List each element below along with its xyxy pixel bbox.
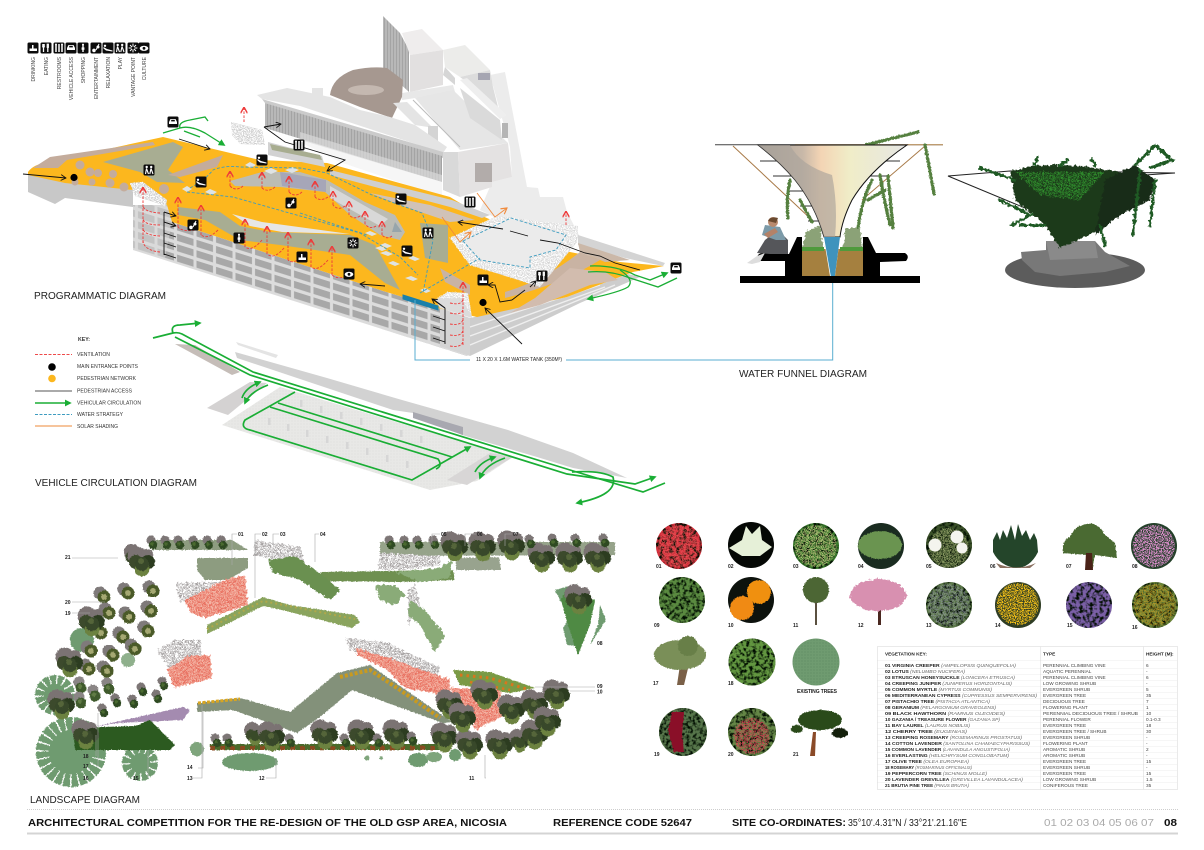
vegetation key table: 16 EVERLASTING (HELICHRYSUM CONGLOBATUM) <box>885 753 1009 758</box>
water strategy dashed lines <box>187 166 566 293</box>
vegetation key table: CONIFEROUS TREE <box>1043 783 1088 788</box>
vegetation key table: EVERGREEN TREE <box>1043 771 1086 776</box>
vegetation key table: 0.1-0.3 <box>1146 717 1161 722</box>
large trees <box>48 530 611 750</box>
vegetation key table: 18 ROSEMARY (ROSMARINUS OFFICINALIS) <box>885 765 972 770</box>
09 black hawthorn: 09 <box>654 623 660 629</box>
plant number labels and leaders: 02 <box>262 532 268 538</box>
vegetation key table: 1 <box>1146 705 1149 710</box>
vegetation key table: PERENNIAL FLOWER <box>1043 717 1091 722</box>
key: VEHICULAR CIRCULATION <box>77 400 141 406</box>
vegetation key table: 20 LAVENDER GREVILLEA (GREVILLEA LAVANDULACEA) <box>885 777 1023 782</box>
plant number labels and leaders: 14 <box>187 765 193 771</box>
plant number labels and leaders: 21 <box>65 555 71 561</box>
funnel membrane <box>758 145 907 237</box>
vegetation key table: VEGETATION KEY: <box>885 652 927 656</box>
vegetation key table: AROMATIC SHRUB <box>1043 753 1085 758</box>
vegetation key table: EVERGREEN SHRUB <box>1043 687 1090 692</box>
legend: programme icons: VEHICLE ACCESS <box>69 56 75 100</box>
vegetation key table: EVERGREEN TREE <box>1043 693 1086 698</box>
plant number labels and leaders <box>65 532 603 782</box>
vegetation key table: 01 VIRGINIA CREEPER (AMPELOPSIS QUINQUEFOLIA) <box>885 663 1016 668</box>
footer band: ARCHITECTURAL COMPETITION FOR THE RE-DESIGN OF THE OLD GSP AREA, NICOSIA <box>28 817 507 829</box>
vegetation key table: - <box>1146 741 1148 746</box>
vegetation key table: 5 <box>1146 687 1149 692</box>
pedestrian network deck <box>28 137 664 317</box>
vegetation key table: 10 <box>1146 711 1152 716</box>
vegetation key table: 11 BAY LAUREL (LAURUS NOBILIS) <box>885 723 970 728</box>
water tank leader line and label <box>415 283 833 363</box>
key <box>35 337 141 430</box>
13 creeping rosemary <box>926 582 972 629</box>
footer band: 35°10'.4.31"N / 33°21'.21.16"E <box>848 818 967 829</box>
plant number labels and leaders: 15 <box>133 776 139 782</box>
purple and dark planting wedge <box>73 707 190 750</box>
legend: programme icons: EATING <box>44 57 50 75</box>
vegetation key table: 35 <box>1146 693 1152 698</box>
programme icons on deck <box>144 116 682 286</box>
heading: landscape diagram: LANDSCAPE DIAGRAM <box>30 795 140 806</box>
vegetation key table: 7 <box>1146 699 1149 704</box>
21 brutia pine: 21 <box>793 752 799 758</box>
existing trees swatch <box>792 638 840 695</box>
plant number labels and leaders: 18 <box>83 754 89 760</box>
heading: vehicle circulation diagram: VEHICLE CIRCULATION DIAGRAM <box>35 478 197 489</box>
plant number labels and leaders: 20 <box>65 600 71 606</box>
18 rosemary <box>728 638 776 687</box>
vegetation key table: PERENNIAL DECIDUOUS TREE / SHRUB <box>1043 711 1138 716</box>
legend: programme icons: VANTAGE POINT <box>131 57 137 97</box>
01 virginia creeper <box>656 523 702 570</box>
plant number labels and leaders: 16 <box>83 776 89 782</box>
03 honeysuckle: 03 <box>793 564 799 570</box>
bottom tree row and curved grove <box>210 680 570 760</box>
plant number labels and leaders: 01 <box>238 532 244 538</box>
existing trees <box>41 584 606 779</box>
vegetation key table: 19 PEPPERCORN TREE (SCHINUS MOLLE) <box>885 771 987 776</box>
key: PEDESTRIAN NETWORK <box>77 376 137 382</box>
vegetation key table: EVERGREEN SHRUB <box>1043 735 1090 740</box>
vegetation key table: 15 <box>1146 759 1152 764</box>
pink flowering shrubs <box>167 575 505 730</box>
ventilation arrows <box>143 108 566 346</box>
vegetation key table: 6 <box>1146 675 1149 680</box>
planting behind funnel <box>802 226 863 249</box>
08 geranium: 08 <box>1132 564 1138 570</box>
vehicular routes <box>153 323 665 503</box>
flowering edges <box>198 601 530 718</box>
key: WATER STRATEGY <box>77 412 124 418</box>
legend: programme icons: PLAY <box>118 56 124 69</box>
vegetation key table: 07 PISTACHIO TREE (PISTACIA ATLANTICA) <box>885 699 990 704</box>
vegetation key table: EVERGREEN TREE / SHRUB <box>1043 729 1106 734</box>
footer band: 08 <box>1164 817 1177 829</box>
20 lavender grevillea: 20 <box>728 752 734 758</box>
02 lotus: 02 <box>728 564 734 570</box>
vegetation key table: PERENNIAL CLIMBING VINE <box>1043 675 1106 680</box>
vegetation key table: - <box>1146 753 1148 758</box>
plant photo swatches <box>653 522 1178 758</box>
vegetation key table: 04 CREEPING JUNIPER (JUNIPERUS HORIZONTALIS) <box>885 681 1012 686</box>
21 brutia pine <box>791 710 848 758</box>
12 cherry tree <box>850 579 906 629</box>
footer band: 01 02 03 04 05 06 07 <box>1044 818 1155 829</box>
vegetation key table: 10 GAZANIA / TREASURE FLOWER (GAZANIA SP) <box>885 717 1000 722</box>
climbing vines <box>787 132 934 228</box>
01 virginia creeper: 01 <box>656 564 662 570</box>
water tank leader line and label: 11 X 20 X 1.6M WATER TANK (350M³) <box>476 357 562 363</box>
14 cotton lavender: 14 <box>995 623 1001 629</box>
plant number labels and leaders: 04 <box>320 532 326 538</box>
02 lotus <box>728 522 774 570</box>
vegetation key table: 17 OLIVE TREE (OLEA EUROPAEA) <box>885 759 969 764</box>
vegetation key table: 05 COMMON MYRTLE (MYRTUS COMMUNIS) <box>885 687 992 692</box>
vegetation key table <box>878 646 1178 790</box>
key: KEY: <box>78 337 90 343</box>
vegetation key table: PERENNIAL CLIMBING VINE <box>1043 663 1106 668</box>
plant number labels and leaders: 10 <box>597 690 603 696</box>
10 gazania: 10 <box>728 623 734 629</box>
vehicular circulation arrows <box>163 117 677 299</box>
legend: programme icons: DRINKING <box>31 57 37 81</box>
plant number labels and leaders: 11 <box>469 776 475 782</box>
12 cherry tree: 12 <box>858 623 864 629</box>
plant number labels and leaders: 08 <box>597 641 603 647</box>
footer band: REFERENCE CODE 52647 <box>553 817 692 829</box>
vegetation key table: FLOWERING PLANT <box>1043 705 1088 710</box>
key: PEDESTRIAN ACCESS <box>77 388 133 394</box>
14 cotton lavender <box>995 582 1041 629</box>
03 honeysuckle <box>793 523 839 570</box>
vegetation key table: - <box>1146 735 1148 740</box>
planted ring with water court <box>450 216 578 287</box>
vegetation key table: 1.5 <box>1146 777 1153 782</box>
11 bay laurel: 11 <box>793 623 799 629</box>
16 everlasting <box>1132 582 1178 631</box>
key: MAIN ENTRANCE POINTS <box>77 364 139 370</box>
landscape diagram <box>41 530 615 782</box>
planting and paving patches <box>33 142 665 313</box>
key: VENTILATION <box>77 352 110 358</box>
07 pistachio tree <box>1063 524 1117 570</box>
19 peppercorn tree <box>654 708 707 758</box>
vegetation key table: 2 <box>1146 747 1149 752</box>
parking structure side wall <box>28 175 640 356</box>
legend: programme icons: CULTURE <box>142 56 148 80</box>
water tank <box>403 295 438 310</box>
vegetation key table: 14 COTTON LAVENDER (SANTOLINA CHAMAECYPARISSUS) <box>885 741 1030 746</box>
13 creeping rosemary: 13 <box>926 623 932 629</box>
vegetation key table: DECIDUOUS TREE <box>1043 699 1085 704</box>
legend: programme icons: RELAXATION <box>106 57 112 88</box>
18 rosemary: 18 <box>728 681 734 687</box>
vegetation key table: 03 ETRUSCAN HONEYSUCKLE (LONICERA ETRUSCA) <box>885 675 1015 680</box>
canopy frame <box>715 145 943 221</box>
plant number labels and leaders: 03 <box>280 532 286 538</box>
grey and white climbers <box>157 540 440 678</box>
seated person <box>747 217 788 264</box>
vegetation key table: - <box>1146 669 1148 674</box>
05 common myrtle: 05 <box>926 564 932 570</box>
key: SOLAR SHADING <box>77 424 118 430</box>
plant number labels and leaders: 07 <box>513 532 519 538</box>
plant number labels and leaders: 17 <box>83 764 89 770</box>
vegetation key table: - <box>1146 765 1148 770</box>
vegetation key table: 02 LOTUS (NELUMBO NUCIFERA) <box>885 669 965 674</box>
15 common lavender <box>1066 582 1112 629</box>
green climbers <box>268 556 452 652</box>
heading: programmatic diagram: PROGRAMMATIC DIAGRAM <box>34 291 166 302</box>
06 mediterranean cypress: 06 <box>990 564 996 570</box>
existing buildings and dome <box>257 16 580 250</box>
legend: programme icons <box>28 42 150 100</box>
speckled vegetation walls <box>130 122 472 318</box>
vegetation key table: AQUATIC PERENNIAL <box>1043 669 1092 674</box>
planter section in black <box>740 237 920 283</box>
plant number labels and leaders: 13 <box>187 776 193 782</box>
vegetation key table: 21 BRUTIA PINE TREE (PINUS BRUTIA) <box>885 783 969 788</box>
vegetation key table: - <box>1146 681 1148 686</box>
10 gazania <box>728 577 774 629</box>
05 common myrtle <box>926 522 972 570</box>
vegetation key table: 15 <box>1146 771 1152 776</box>
heading: water funnel diagram: WATER FUNNEL DIAGRAM <box>739 369 867 380</box>
legend: programme icons: SHOPPING <box>81 57 87 83</box>
06 mediterranean cypress <box>990 524 1038 570</box>
solar shading arrows <box>442 193 507 242</box>
plant number labels and leaders: 12 <box>259 776 265 782</box>
vegetation key table: EVERGREEN TREE <box>1043 759 1086 764</box>
legend: programme icons: ENTERTAINMENT <box>94 57 100 99</box>
vegetation key table: 30 <box>1146 729 1152 734</box>
plant number labels and leaders: 06 <box>477 532 483 538</box>
08 geranium <box>1131 523 1177 570</box>
main entrance points <box>70 174 487 306</box>
palm and small tree cluster <box>74 580 168 717</box>
plant number labels and leaders: 05 <box>441 532 447 538</box>
soil <box>802 249 863 276</box>
vegetation key table: 08 GERANIUM (PELARGONIUM GRAVEOLENS) <box>885 705 996 710</box>
vegetation key table: 13 CREEPING ROSEMARY (ROSEMARINUS PROSTATUS) <box>885 735 1022 740</box>
planter perspective view <box>948 145 1175 288</box>
water funnel section <box>715 132 943 283</box>
15 common lavender: 15 <box>1067 623 1073 629</box>
17 olive tree <box>653 636 706 687</box>
19 peppercorn tree: 19 <box>654 752 660 758</box>
floor plate and ramps <box>175 342 627 490</box>
vegetation key table: 12 CHERRY TREE (EUGENIAS) <box>885 729 968 734</box>
vegetation key table: FLOWERING PLANT <box>1043 741 1088 746</box>
vegetation key table: 06 MEDITERRANEAN CYPRESS (CUPRESSUS SEMPERVIRENS) <box>885 693 1037 698</box>
vegetation key table: EVERGREEN TREE <box>1043 723 1086 728</box>
existing trees swatch: EXISTING TREES <box>797 689 838 695</box>
11 bay laurel <box>793 577 829 629</box>
vegetation key table: AROMATIC SHRUB <box>1043 747 1085 752</box>
green linear planting strips <box>147 540 615 733</box>
vegetation key table: 18 <box>1146 723 1152 728</box>
plant number labels and leaders: 19 <box>65 611 71 617</box>
20 lavender grevillea <box>728 708 776 758</box>
plant number labels and leaders: 09 <box>597 684 603 690</box>
vehicle circulation diagram <box>153 323 665 503</box>
07 pistachio tree: 07 <box>1066 564 1072 570</box>
water channel <box>824 237 840 283</box>
legend: programme icons: RESTROOMS <box>57 56 63 89</box>
programmatic diagram: axonometric <box>23 16 682 356</box>
vegetation key table: EVERGREEN SHRUB <box>1043 765 1090 770</box>
09 black hawthorn <box>654 577 705 629</box>
04 creeping juniper <box>858 523 904 570</box>
vegetation key table: 09 BLACK HAWTHORN (RAMNUS OLEOIDES) <box>885 711 1005 716</box>
vegetation key table: 15 COMMON LAVENDER (LAVANDULA ANGUSTIFOLIA) <box>885 747 1010 752</box>
vegetation key table: LOW GROWING SHRUB <box>1043 681 1096 686</box>
top tree row <box>146 534 609 549</box>
pedestrian access arrows <box>23 124 640 344</box>
footer band: SITE CO-ORDINATES: <box>732 817 846 829</box>
footer band <box>27 810 1178 834</box>
16 everlasting: 16 <box>1132 625 1138 631</box>
vegetation key table: LOW GROWING SHRUB <box>1043 777 1096 782</box>
vegetation key table: 6 <box>1146 663 1149 668</box>
04 creeping juniper: 04 <box>858 564 864 570</box>
vegetation key table: TYPE <box>1043 652 1055 656</box>
17 olive tree: 17 <box>653 681 659 687</box>
vegetation key table: 35 <box>1146 783 1152 788</box>
vegetation key table: HEIGHT (M): <box>1146 652 1174 656</box>
